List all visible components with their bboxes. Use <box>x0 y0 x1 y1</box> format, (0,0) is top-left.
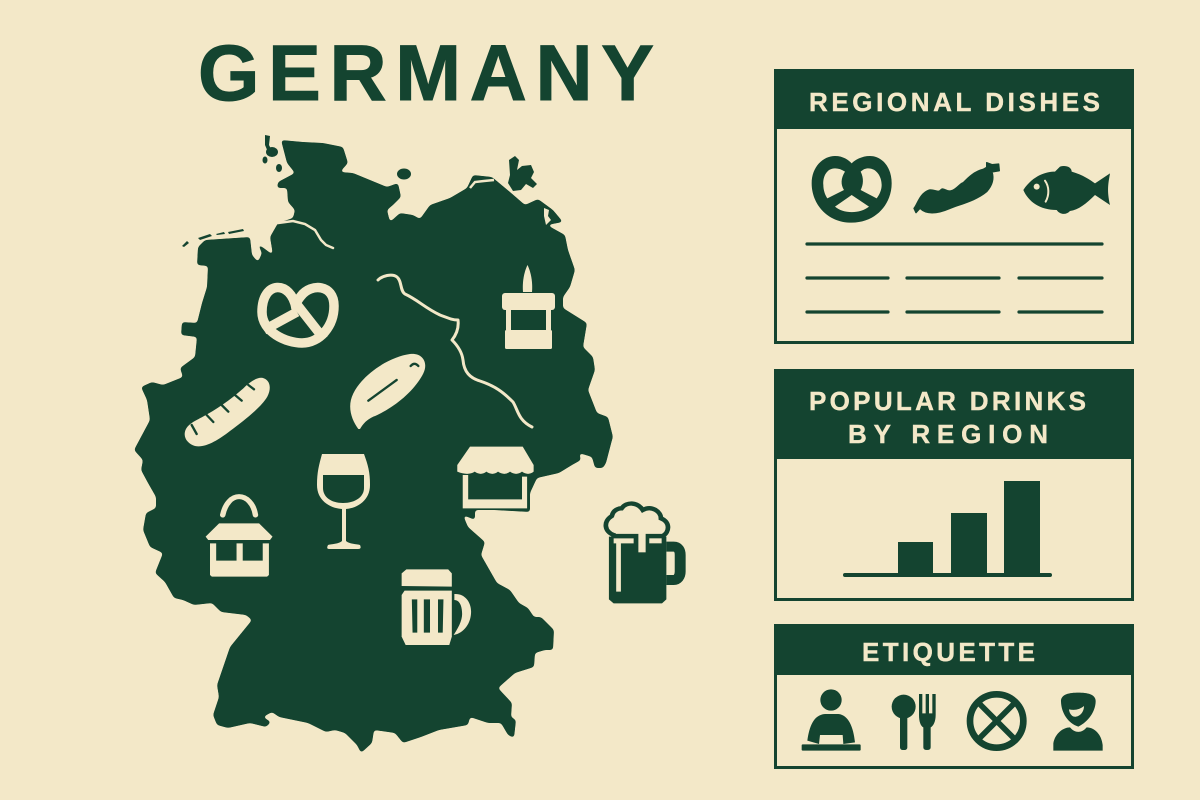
heading: popular drinks: POPULAR DRINKS <box>809 386 1086 416</box>
panel: popular drinks by region <box>775 369 1134 600</box>
icon: smiling person <box>1053 693 1103 751</box>
heading: etiquette <box>775 624 1134 675</box>
bar chart <box>843 481 1052 577</box>
icon: spoon and fork <box>892 694 936 750</box>
icon: basket house on map <box>206 497 273 577</box>
icon: crossed circle <box>970 694 1023 748</box>
heading: popular drinks: BY REGION <box>848 419 1048 449</box>
river <box>378 275 532 427</box>
panel: etiquette <box>775 624 1134 768</box>
map silhouette <box>134 140 613 753</box>
icon: wine glass on map <box>317 454 370 549</box>
heading: popular drinks <box>775 369 1134 459</box>
river Elbe estuary <box>278 221 333 248</box>
heading: regional dishes: REGIONAL DISHES <box>809 87 1100 117</box>
map of Germany with food icons <box>134 135 680 753</box>
icon: pretzel on map <box>262 287 334 343</box>
icon: gate stall on map <box>502 265 555 349</box>
islands <box>182 135 537 247</box>
icon: seated person <box>802 689 861 751</box>
table placeholder lines <box>807 244 1102 312</box>
heading: regional dishes <box>775 69 1134 129</box>
icon: fish <box>1023 166 1110 214</box>
icon: beer mug on map <box>402 569 471 645</box>
heading: etiquette: ETIQUETTE <box>862 637 1035 667</box>
icon: beer mug beside map <box>606 504 680 603</box>
icon: sausage <box>914 163 999 213</box>
icon: pretzel <box>812 156 892 223</box>
lagoon and coast details <box>470 180 494 188</box>
title: GERMANY <box>198 28 654 117</box>
icon: market stall on map <box>457 447 534 508</box>
panel: regional dishes <box>775 69 1134 342</box>
icon: sausage on map <box>185 378 270 446</box>
icon: leaf-shaped sausage on map <box>350 354 425 429</box>
